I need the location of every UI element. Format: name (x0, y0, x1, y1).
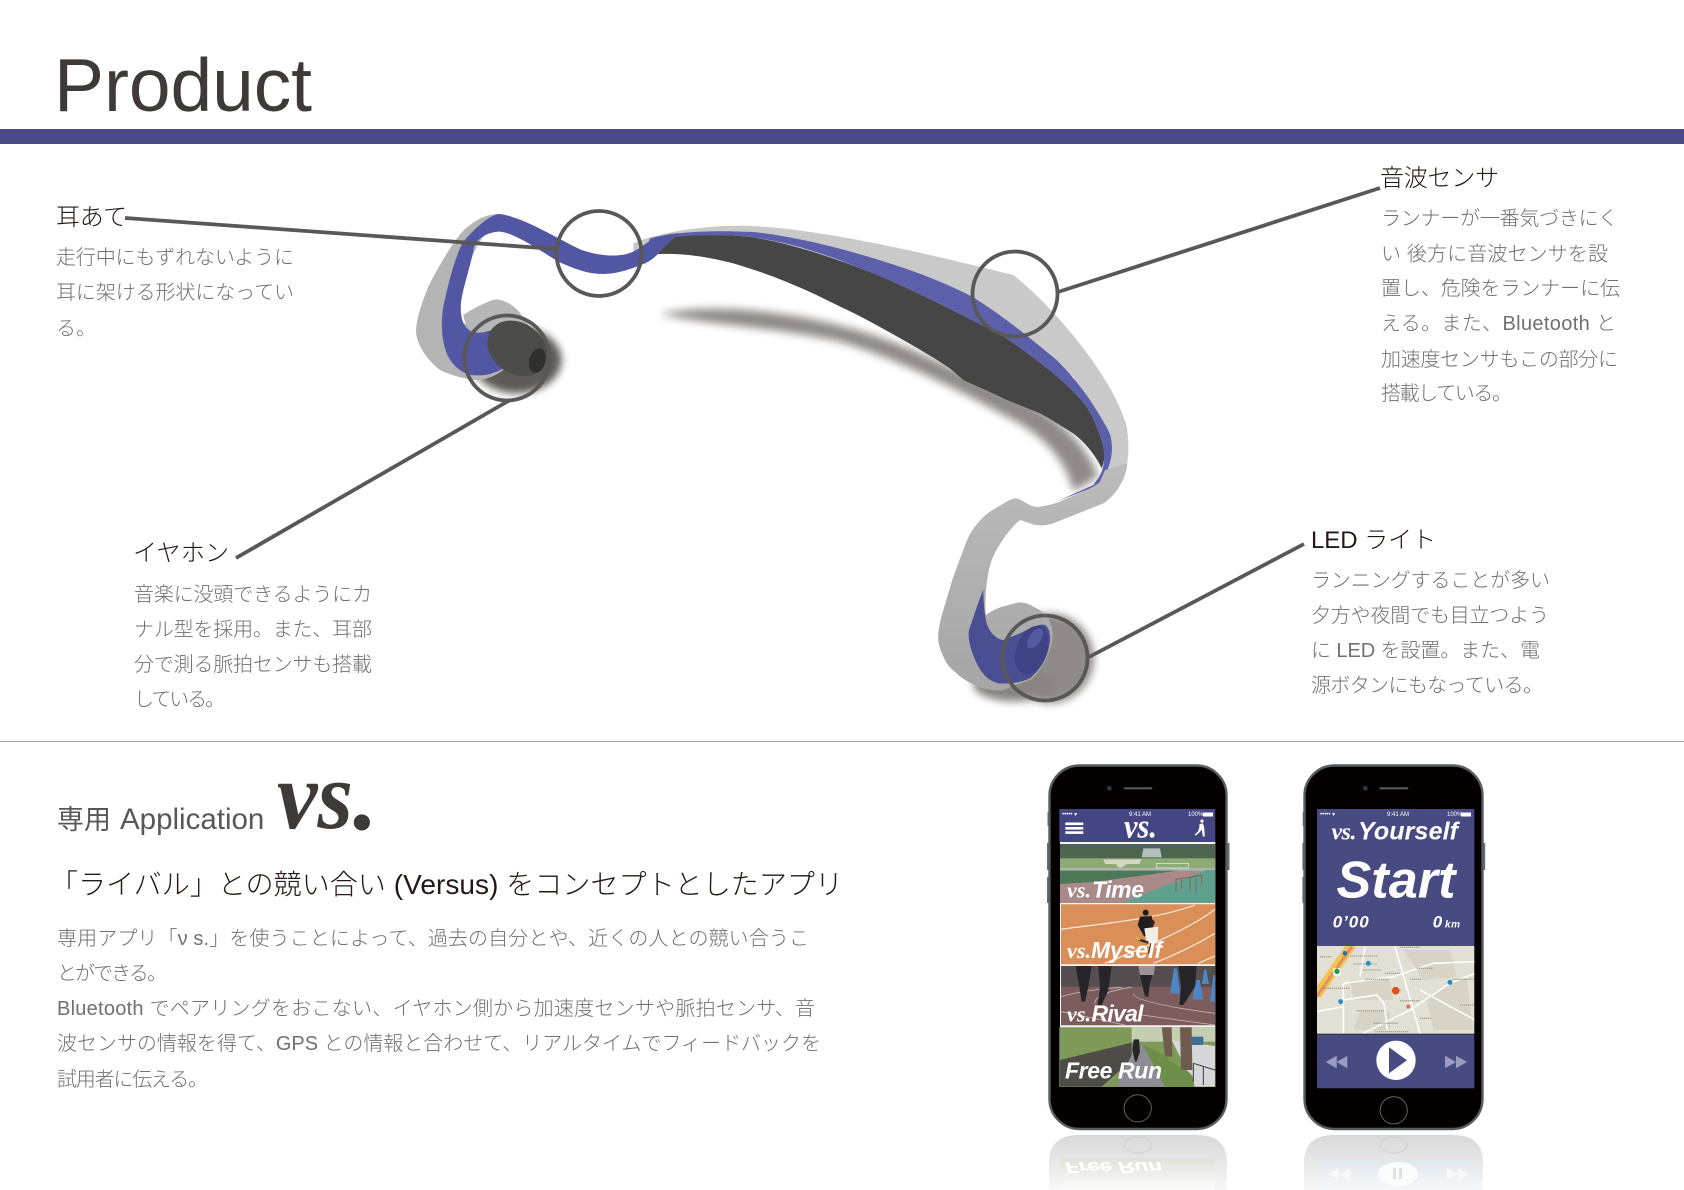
menu tile label: vs.Time: vs. (1067, 878, 1091, 903)
dark inner panel (657, 235, 1104, 468)
run header panel: Yourself (1358, 817, 1461, 845)
phone reflection: Free Run (1065, 1158, 1162, 1176)
text block: LED light: ランニングすることが多い (1311, 569, 1550, 592)
text block: app description: 試用者に伝える。 (57, 1068, 208, 1091)
grey hook (416, 214, 503, 380)
logo: vs.: vs (277, 742, 353, 849)
app header: vs. (1124, 808, 1157, 846)
menu tile: vs.Rival (1060, 965, 1217, 1027)
text block: LED light: 源ボタンにもなっている。 (1311, 674, 1543, 697)
callout: earphone marker (236, 316, 550, 558)
phone 2: run screen (1302, 766, 1485, 1190)
LED button (1009, 621, 1055, 679)
menu tile label: Free Run: Free Run (1065, 1057, 1162, 1083)
phone reflection (1049, 1135, 1227, 1190)
text block: ear hook: 走行中にもずれないように (56, 246, 294, 269)
menu tile: vs.Myself (1060, 903, 1217, 965)
earbud hole (526, 346, 548, 375)
subheading: 「ライバル」との競い合い (Versus) をコンセプトとしたアプリ (50, 869, 843, 900)
text block: LED light: LED ライト (1311, 527, 1436, 554)
blue ribbon (640, 231, 1112, 502)
menu tile: vs.Time (1060, 843, 1217, 903)
text block: LED light: に LED を設置。また、電 (1311, 640, 1540, 662)
text block: ear hook: る。 (56, 318, 96, 340)
text block: sound sensor: える。また、Bluetooth と (1381, 313, 1616, 335)
text block: sound sensor: ランナーが一番気づきにく (1381, 207, 1618, 230)
menu tile label: vs.Myself: vs. (1067, 938, 1091, 963)
callout: sound sensor marker (972, 188, 1380, 336)
run header panel: 100% (1447, 812, 1463, 818)
text block: ear hook: 耳に架ける形状になってい (56, 281, 294, 304)
run header panel: 9:41 AM (1387, 812, 1409, 818)
grey hook (938, 463, 1127, 691)
text block: earphone: ナル型を採用。また、耳部 (134, 618, 372, 641)
text block: sound sensor: 加速度センサもこの部分に (1381, 348, 1618, 371)
phone body (1047, 766, 1230, 1129)
run header panel: Start (1336, 852, 1458, 910)
LED shadow (973, 613, 1094, 703)
text block: sound sensor: 置し、危険をランナーに伝 (1381, 277, 1620, 300)
text block: sound sensor: 音波センサ (1380, 165, 1499, 192)
logo: vs.: . (353, 740, 378, 851)
player controls (1317, 1034, 1474, 1088)
heading: dedicated application: Application (120, 803, 264, 836)
text block: ear hook: 耳あて (56, 204, 127, 231)
text block: app description: Bluetooth でペアリングをおこない、イヤホン側から加速度センサや脈拍センサ、音 (57, 997, 815, 1020)
run header panel: vs. (1332, 819, 1356, 845)
phone 1: menu screen (1047, 766, 1230, 1190)
run header panel: km (1445, 919, 1460, 930)
title: Product (54, 43, 312, 127)
map (1317, 945, 1475, 1034)
app header: ••••• ▾ (1062, 812, 1077, 818)
band shadow (660, 309, 1098, 492)
menu tile label: vs.Rival: vs. (1067, 1002, 1091, 1027)
menu tile label: vs.Myself: Myself (1091, 937, 1164, 963)
text block: app description: とができる。 (57, 962, 167, 985)
product illustration: headphones (416, 214, 1128, 703)
text block: earphone: している。 (134, 689, 225, 711)
text block: LED light (1311, 527, 1550, 697)
menu tile label: vs.Time: Time (1092, 877, 1144, 903)
callout: LED marker (1002, 544, 1304, 700)
run header panel: 0 (1433, 912, 1443, 931)
left earbud and hook (416, 214, 678, 393)
text block: app description (57, 927, 821, 1091)
text block: app description: 波センサの情報を得て、GPS との情報と合わせて、リアルタイムでフィードバックを (57, 1032, 821, 1055)
menu tile label: vs.Rival (1067, 1001, 1144, 1027)
header bar (0, 129, 1684, 144)
text block: sound sensor: 搭載している。 (1381, 382, 1512, 405)
run header panel: ••••• ▾ (1320, 812, 1335, 818)
grey band (633, 226, 1128, 480)
phone reflection (1304, 1135, 1483, 1190)
text block: LED light: 夕方や夜間でも目立つよう (1311, 604, 1549, 627)
run header panel: 0’00 (1333, 912, 1369, 931)
app header: 100% (1188, 812, 1204, 818)
menu tile: Free Run (1058, 1027, 1217, 1088)
text block: earphone: 分で測る脈拍センサも搭載 (134, 653, 372, 676)
text block: earphone: イヤホン (133, 540, 229, 567)
menu tile label: vs.Time (1067, 877, 1144, 903)
callout: ear hook marker (125, 211, 642, 296)
text block: app description: 専用アプリ「ν s.」を使うことによって、過去の自分とや、近くの人との競い合うこ (57, 927, 809, 950)
menu tile label: vs.Rival: Rival (1092, 1001, 1144, 1027)
right hook and LED (938, 463, 1127, 703)
run header panel (1317, 809, 1474, 946)
text block: sound sensor: い 後方に音波センサを設 (1381, 242, 1608, 266)
text block: ear hook (56, 204, 294, 340)
heading: dedicated application: 専用 (57, 805, 111, 835)
LED highlight (1024, 626, 1046, 651)
earbud shadow (472, 327, 562, 393)
earbud tip (477, 309, 558, 387)
earbud pad (463, 299, 540, 370)
blue ear section (969, 590, 1050, 683)
text block: sound sensor (1380, 165, 1620, 405)
blue ribbon (442, 214, 678, 375)
text block: earphone: 音楽に没頭できるようにカ (134, 583, 372, 606)
headband and shadow (633, 226, 1128, 502)
app header (1059, 808, 1215, 846)
text block: earphone (133, 540, 372, 711)
phone body (1302, 766, 1485, 1129)
app header: 9:41 AM (1129, 812, 1151, 818)
